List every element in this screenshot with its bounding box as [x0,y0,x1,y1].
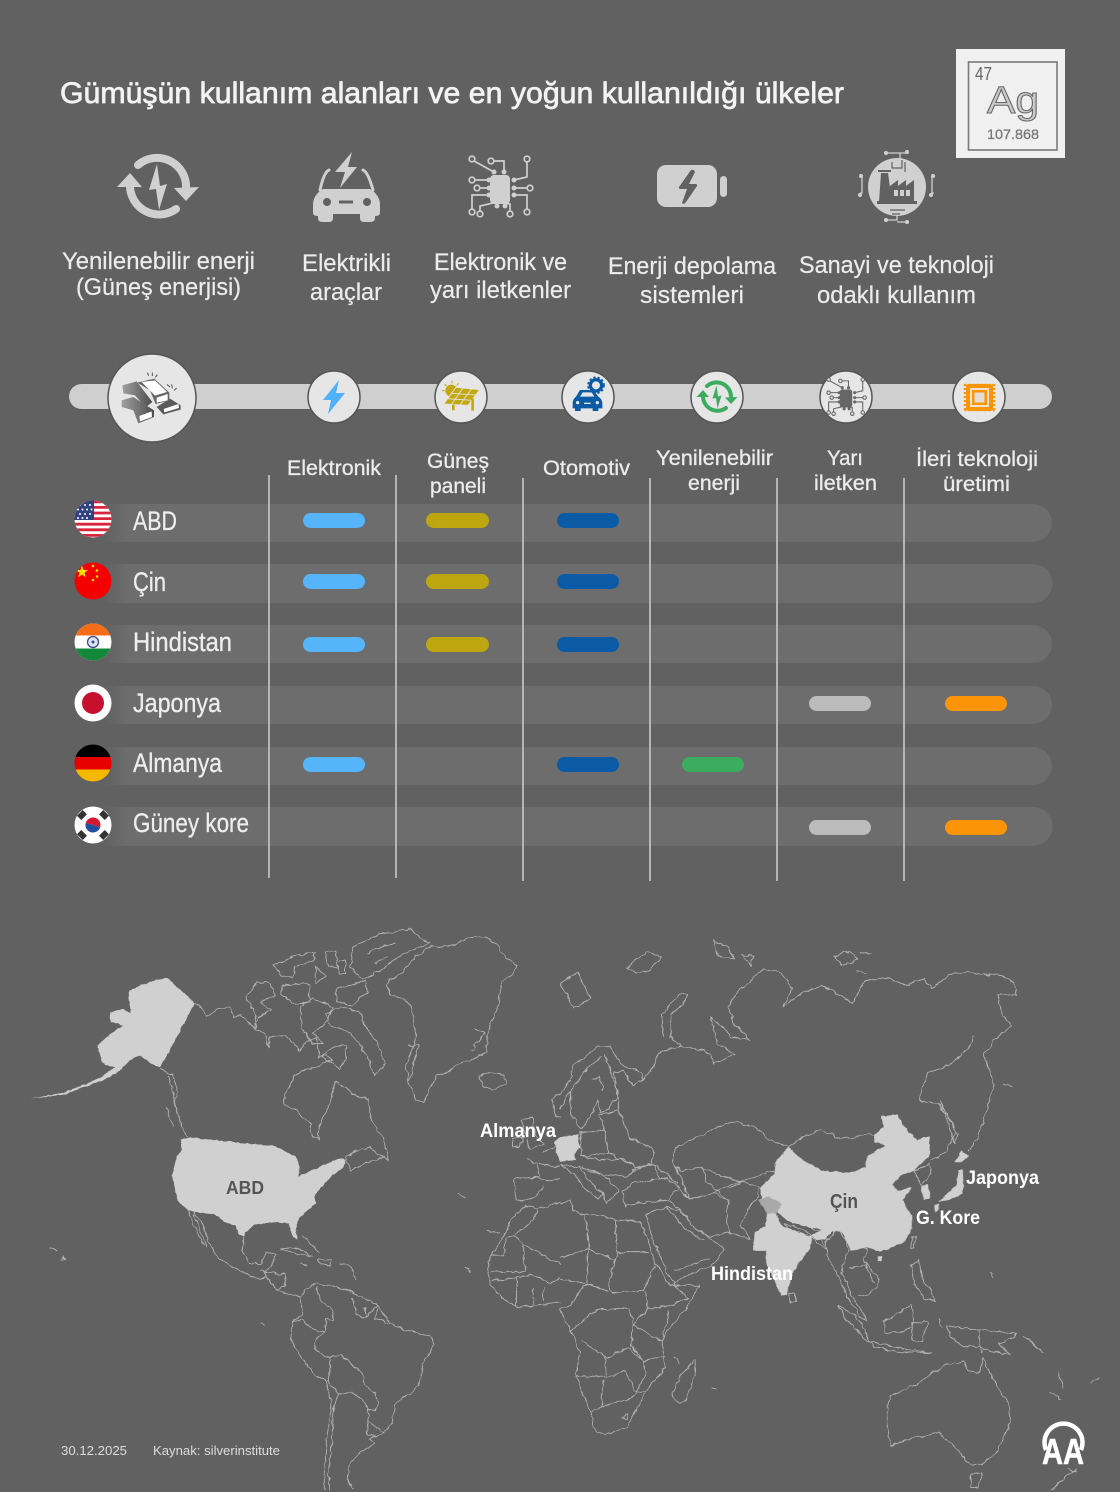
map label: Hindistan: Hindistan [711,1264,793,1285]
icon: electric car [313,152,380,222]
country name: ABD: ABD [133,506,177,536]
icon: renewable energy green [691,371,743,423]
label: renewable energy: Yenilenebilir enerji [62,248,255,275]
matrix pills: Yarı iletken [809,696,871,835]
label: industry and technology: odaklı kullanım [817,282,976,309]
icon: silver periodic table element: 47 [975,64,992,84]
icon: silver periodic table element: Ag [987,80,1039,122]
icon: lightning bolt [308,371,360,423]
label: electric cars [302,250,391,306]
country name: Çin: Çin [133,567,166,597]
country: Japan [934,1151,969,1213]
country name: Almanya: Almanya [133,748,223,778]
icon: semiconductor chip [820,371,872,423]
column headings: Elektronik [287,456,381,480]
label: electric cars: Elektrikli [302,250,391,277]
label: industry and technology: Sanayi ve teknoloji [799,252,994,279]
logo: Anadolu Agency: AA [1042,1431,1084,1472]
column headings: paneli [430,474,486,498]
icon: silver bars [108,354,196,442]
matrix pills: Otomotiv [557,513,619,772]
row bands [104,504,1052,846]
world map [30,929,1099,1490]
column headings: İleri teknoloji [916,447,1038,471]
column headings [287,446,1038,498]
matrix pills: İleri teknoloji üretimi [945,696,1007,835]
column headings: enerji [688,471,740,495]
icon: silver periodic table element: 107.868 [987,126,1039,142]
icon: automotive [562,371,614,423]
country: contiguous USA [172,1137,345,1239]
icon: advanced technology chip [953,371,1005,423]
matrix pills: Elektronik [303,513,365,772]
country name: Japonya: Japonya [133,688,222,718]
column headings: Yenilenebilir [656,446,773,470]
label: electronics: yarı iletkenler [430,277,571,304]
map label: ABD: ABD [226,1178,264,1198]
panel: usage areas [62,150,994,309]
icon: solar panel [435,371,487,423]
icon: renewable energy [117,158,199,215]
country: South Korea [921,1185,931,1200]
footer date: 30.12.2025 [61,1443,127,1458]
flag: Japan [74,684,112,722]
label: industry and technology [799,252,994,309]
column headings: üretimi [943,472,1010,496]
label: renewable energy: (Güneş enerjisi) [76,274,241,301]
column headings: Güneş [427,449,489,473]
column headings: Otomotiv [543,456,630,480]
label: renewable energy [62,248,255,301]
icon: factory [858,150,935,224]
country: China [760,1114,930,1262]
column dividers [269,475,904,881]
label: electronics: Elektronik ve [434,249,567,276]
matrix pill: Yenilenebilir enerji [682,757,744,772]
label: energy storage: Enerji depolama [608,253,777,280]
column headings: iletken [814,471,877,495]
label: energy storage [608,253,777,309]
disputed area: Kashmir [758,1196,782,1214]
map label: Çin: Çin [830,1191,858,1213]
footer source: Kaynak: silverinstitute [153,1443,280,1458]
country: Germany [555,1134,580,1162]
country name: Hindistan: Hindistan [133,627,232,657]
timeline with sector icons [69,354,1052,442]
icon: silver periodic table element [956,49,1065,158]
label: electronics [430,249,571,304]
map label: Almanya: Almanya [480,1121,556,1142]
flag: Germany [74,744,112,782]
flag: USA [74,500,112,538]
title: Gümüşün kullanım alanları ve en yoğun kullanıldığı ülkeler [60,77,844,110]
column headings: Yarı [827,446,863,470]
icon: electronics chip [469,156,533,217]
map label: G. Kore: G. Kore [916,1208,980,1229]
highlighted countries [30,978,969,1296]
country: India [753,1213,839,1296]
matrix pills: Güneş paneli [426,513,489,652]
country: Alaska [30,978,195,1099]
label: electric cars: araçlar [310,279,382,306]
map label: Japonya: Japonya [966,1168,1039,1189]
icon: battery [657,165,727,207]
flag: India [74,623,112,661]
country name: Güney kore: Güney kore [133,808,249,838]
label: energy storage: sistemleri [640,282,744,309]
map: outlines [49,929,1099,1490]
flag: China [74,562,112,600]
flag: South Korea [74,806,112,844]
